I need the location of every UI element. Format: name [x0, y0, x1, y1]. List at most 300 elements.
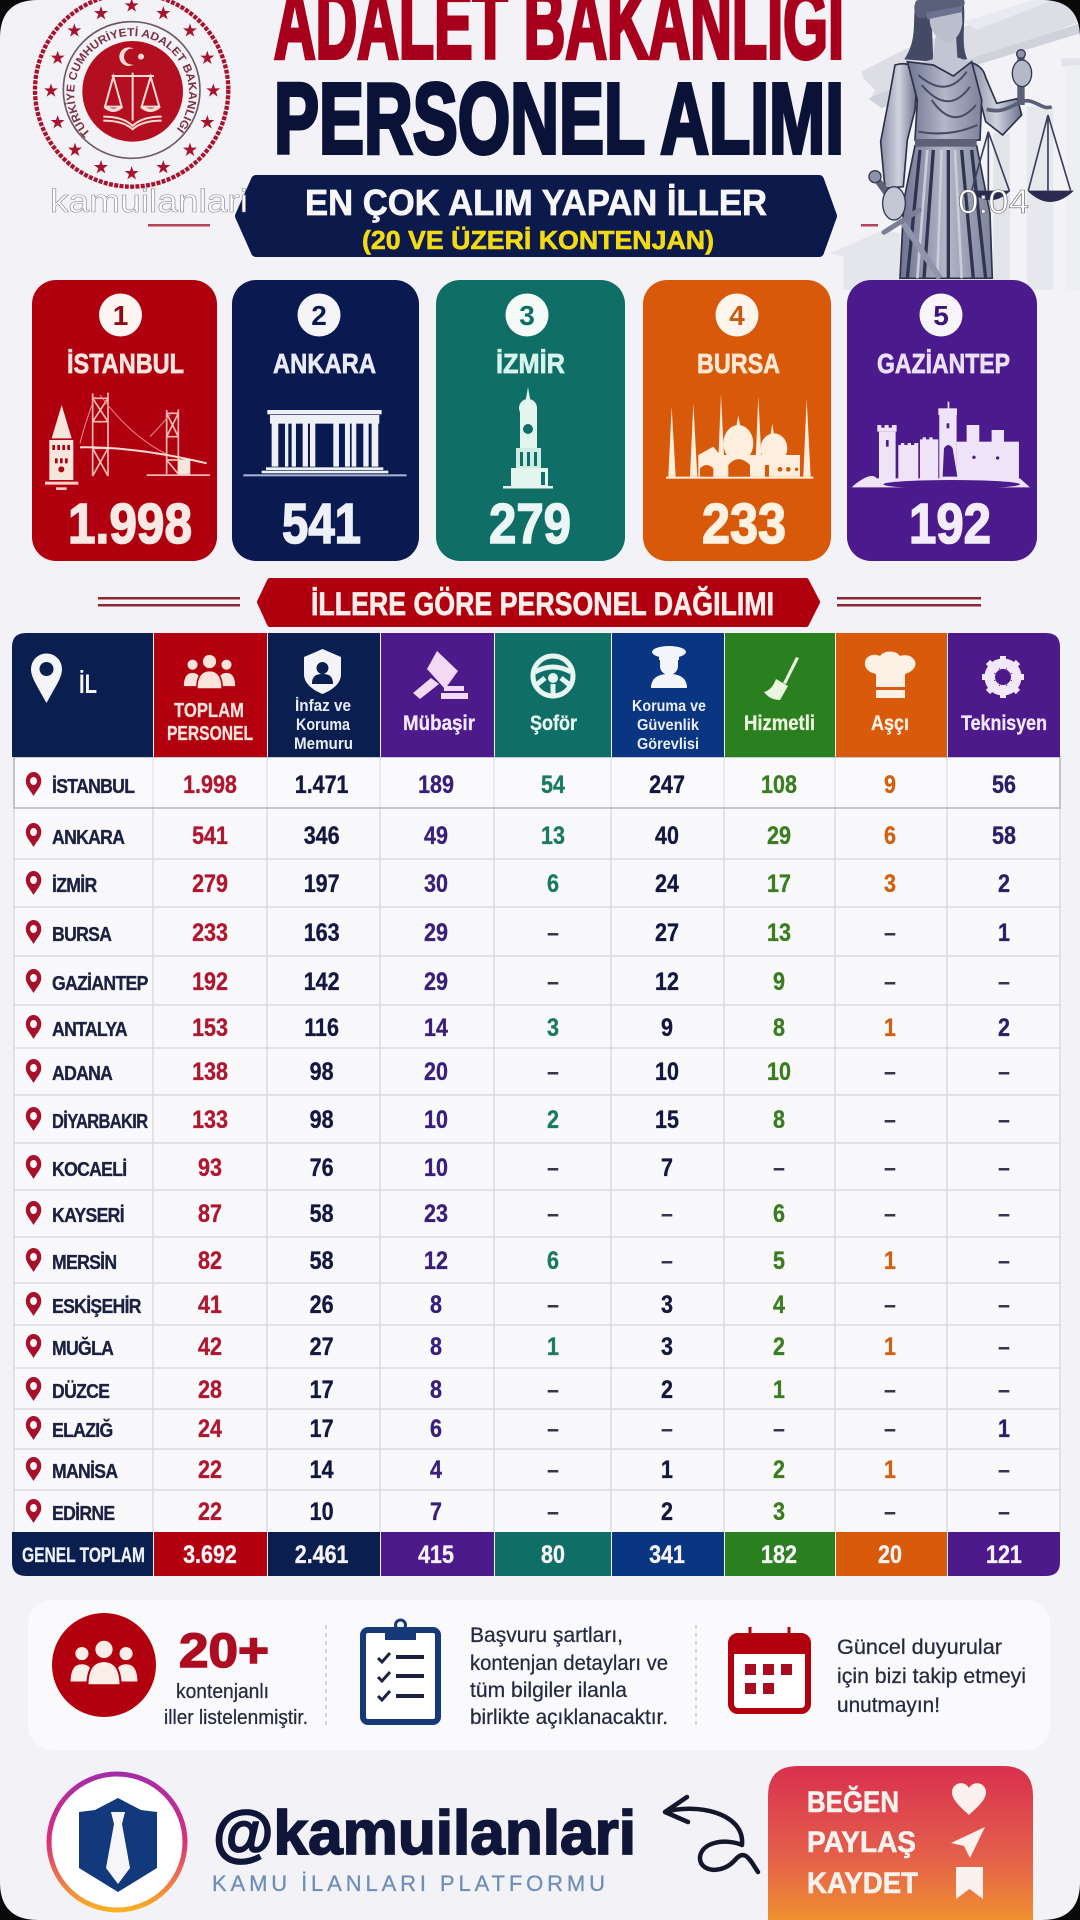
row: Diyarbakır — [26, 1105, 1010, 1133]
header cell: İnfaz ve Koruma Memuru — [268, 633, 380, 757]
gradient ring — [49, 1774, 185, 1910]
row: Düzce: – — [998, 1375, 1010, 1403]
row: Kocaeli: KOCAELİ — [52, 1159, 127, 1181]
row: İstanbul: 56 — [992, 770, 1016, 798]
table body background — [14, 757, 1060, 1532]
row: Antalya: 8 — [773, 1013, 785, 1041]
label: Aşçı — [871, 712, 909, 735]
row: Kayseri: – — [998, 1199, 1010, 1227]
row: İzmir: 279 — [192, 869, 228, 897]
row: Elazığ: 1 — [998, 1414, 1010, 1442]
row: Muğla: 8 — [430, 1332, 442, 1360]
label: İnfaz ve — [295, 696, 351, 715]
row: Eskişehir: 41 — [198, 1290, 222, 1318]
table grid — [14, 757, 1060, 1532]
row: Düzce: – — [547, 1375, 559, 1403]
row: Diyarbakır: 8 — [773, 1105, 785, 1133]
row: Ankara: 29 — [767, 821, 791, 849]
row: Mersin: MERSİN — [52, 1252, 116, 1274]
row: İstanbul: 9 — [884, 770, 896, 798]
row: Düzce: – — [884, 1375, 896, 1403]
row: Kayseri: – — [547, 1199, 559, 1227]
statue face — [928, 7, 962, 43]
row: Edirne: 2 — [661, 1497, 673, 1525]
row: İzmir: 3 — [884, 869, 896, 897]
video overlay: timer: 0:04 — [958, 183, 1029, 220]
decorative lines right — [837, 597, 981, 606]
row: Edirne: 10 — [310, 1497, 334, 1525]
row: Muğla: 42 — [198, 1332, 222, 1360]
row: Mersin: 58 — [310, 1246, 334, 1274]
row: Antalya: ANTALYA — [52, 1019, 128, 1041]
row: Elazığ: – — [661, 1414, 673, 1442]
value: 279 — [489, 492, 571, 556]
row: Edirne: – — [998, 1497, 1010, 1525]
row: Elazığ: – — [884, 1414, 896, 1442]
total values: 415 — [418, 1540, 454, 1568]
row: Kayseri: 6 — [773, 1199, 785, 1227]
row: Diyarbakır: 2 — [547, 1105, 559, 1133]
row: Eskişehir: ESKİŞEHİR — [52, 1296, 142, 1318]
row: Antalya: 3 — [547, 1013, 559, 1041]
row: Antalya: 9 — [661, 1013, 673, 1041]
background temple — [830, 0, 1080, 290]
row: Kocaeli: – — [773, 1153, 785, 1181]
like: BEĞEN — [807, 1785, 899, 1819]
row: Manisa — [26, 1455, 1010, 1483]
row: Ankara: 346 — [304, 821, 340, 849]
crescent and star — [119, 47, 138, 66]
row: Eskişehir: – — [998, 1290, 1010, 1318]
row: Kocaeli: 93 — [198, 1153, 222, 1181]
panel: İstanbul card — [32, 280, 217, 561]
icon: mosque — [666, 394, 813, 479]
row: İstanbul: 247 — [649, 770, 685, 798]
row: Diyarbakır: 98 — [310, 1105, 334, 1133]
row: Diyarbakır: – — [998, 1105, 1010, 1133]
rank badge: 5 — [933, 300, 949, 331]
row: Bursa: – — [547, 918, 559, 946]
header cell: Aşçı — [836, 633, 947, 757]
row: Bursa: 27 — [655, 918, 679, 946]
row: Muğla: 1 — [547, 1332, 559, 1360]
scales — [1017, 55, 1025, 105]
statue hair — [904, 2, 967, 62]
icon: shield — [79, 1798, 157, 1892]
text: 20+: kontenjanlı — [176, 1681, 269, 1703]
text: follow: unutmayın! — [837, 1694, 940, 1717]
rank badge: 2 — [311, 300, 327, 331]
row: Gaziantep — [26, 967, 1010, 995]
icon: people — [183, 654, 236, 689]
icon: gavel — [413, 651, 468, 699]
statue of Lady Justice — [869, 0, 1074, 278]
text: follow: için bizi takip etmeyi — [837, 1665, 1026, 1688]
row: Eskişehir: 8 — [430, 1290, 442, 1318]
panel: Bursa card — [643, 280, 831, 561]
row: Mersin: – — [998, 1246, 1010, 1274]
row: Adana: – — [547, 1057, 559, 1085]
row: İzmir: 6 — [547, 869, 559, 897]
row: İstanbul — [26, 770, 1016, 798]
row: Bursa — [26, 918, 1010, 946]
row: Düzce: 8 — [430, 1375, 442, 1403]
header cell: Koruma ve Güvenlik Görevlisi: Görevlisi — [637, 736, 699, 753]
ministry seal — [32, 0, 230, 189]
icon: clock tower — [503, 387, 553, 488]
icon: clipboard — [363, 1620, 438, 1722]
icon: chef hat — [865, 652, 915, 698]
statue crown and blindfold — [914, 0, 965, 18]
statue neck — [920, 35, 970, 76]
İstanbul row highlight — [14, 757, 1060, 808]
text: application details: Başvuru şartları, — [470, 1624, 623, 1647]
row: Antalya — [26, 1013, 1010, 1041]
row: Bursa: BURSA — [52, 924, 112, 946]
header cell: Şoför — [495, 633, 611, 757]
row: Muğla: MUĞLA — [52, 1337, 114, 1360]
row: Edirne: 22 — [198, 1497, 222, 1525]
panel: Ankara card — [232, 280, 419, 561]
row: Düzce: 2 — [661, 1375, 673, 1403]
text: application details: tüm bilgiler ilanla — [470, 1679, 627, 1702]
row: Elazığ — [26, 1414, 1010, 1442]
row: İstanbul: 1.471 — [295, 770, 349, 798]
section title: İLLERE GÖRE PERSONEL DAĞILIMI — [311, 586, 774, 622]
total values: 182 — [761, 1540, 797, 1568]
row: Antalya: 153 — [192, 1013, 228, 1041]
row: Manisa: 2 — [773, 1455, 785, 1483]
row: Elazığ: – — [773, 1414, 785, 1442]
city name: GAZİANTEP — [877, 348, 1010, 379]
row: Eskişehir: – — [884, 1290, 896, 1318]
text: 20+: iller listelenmiştir. — [164, 1707, 308, 1729]
text: 20+: 20+ — [179, 1625, 269, 1678]
row: İzmir: 30 — [424, 869, 448, 897]
row: Kocaeli: 10 — [424, 1153, 448, 1181]
row: Muğla: 3 — [661, 1332, 673, 1360]
total values: 341 — [649, 1540, 685, 1568]
row: Mersin: 6 — [547, 1246, 559, 1274]
row: Mersin: 5 — [773, 1246, 785, 1274]
row: Antalya: 14 — [424, 1013, 448, 1041]
label: Şoför — [530, 712, 577, 735]
row: Manisa: 1 — [661, 1455, 673, 1483]
footer logo — [49, 1774, 185, 1910]
icon: castle — [852, 402, 1030, 489]
small dashes beside banner — [148, 224, 878, 226]
row: Edirne: 3 — [773, 1497, 785, 1525]
total values: 80 — [541, 1540, 565, 1568]
row: Ankara: 6 — [884, 821, 896, 849]
row: Kocaeli: – — [547, 1153, 559, 1181]
statue torso — [907, 62, 982, 140]
row: Gaziantep: 192 — [192, 967, 228, 995]
row: Eskişehir: 26 — [310, 1290, 334, 1318]
banner: top cities — [240, 180, 832, 255]
icon: location pin — [31, 654, 62, 703]
value: 1.998 — [68, 492, 192, 556]
row: Ankara: 49 — [424, 821, 448, 849]
row: Adana: – — [998, 1057, 1010, 1085]
panel: İzmir card — [436, 280, 625, 561]
row: Gaziantep: 29 — [424, 967, 448, 995]
row: Mersin: – — [661, 1246, 673, 1274]
row: Edirne — [26, 1497, 1010, 1525]
row: Elazığ: – — [547, 1414, 559, 1442]
icon: gear — [982, 656, 1024, 698]
row: Elazığ: ELAZIĞ — [52, 1419, 113, 1442]
row: Eskişehir — [26, 1290, 1010, 1318]
label: Koruma ve — [632, 698, 706, 715]
city name: İZMİR — [496, 348, 565, 379]
icon: broom — [764, 657, 799, 700]
row: Adana: 10 — [767, 1057, 791, 1085]
row: Adana: ADANA — [52, 1063, 113, 1085]
panel: call to action — [768, 1766, 1033, 1920]
statue belt — [915, 139, 977, 146]
row: Manisa: 14 — [310, 1455, 334, 1483]
row: Adana: 20 — [424, 1057, 448, 1085]
value: 233 — [702, 492, 786, 556]
icon: tie — [106, 1812, 130, 1884]
rope ring — [35, 0, 228, 187]
row: Ankara — [26, 821, 1016, 849]
row: İzmir: İZMİR — [52, 875, 97, 897]
total values: 20 — [878, 1540, 902, 1568]
city name: BURSA — [697, 348, 780, 379]
row: Kayseri: – — [884, 1199, 896, 1227]
banner heading: EN ÇOK ALIM YAPAN İLLER — [305, 182, 767, 223]
row: Gaziantep: – — [998, 967, 1010, 995]
inner ring — [63, 22, 200, 158]
icon: people in red circle — [52, 1613, 156, 1717]
row: Manisa: 4 — [430, 1455, 442, 1483]
row: Düzce: DÜZCE — [52, 1381, 109, 1403]
row: grand total — [12, 1532, 1060, 1576]
row: Edirne: – — [884, 1497, 896, 1525]
row: Edirne: EDİRNE — [52, 1503, 114, 1525]
banner subheading: (20 VE ÜZERİ KONTENJAN) — [362, 225, 714, 255]
row: Mersin: 1 — [884, 1246, 896, 1274]
icon: heart — [952, 1783, 986, 1815]
statue right arm — [972, 63, 1022, 135]
row: Ankara: 13 — [541, 821, 565, 849]
text: application details — [470, 1624, 668, 1729]
table header row — [12, 633, 1060, 757]
rank badge: 4 — [729, 300, 745, 331]
row: Ankara: 58 — [992, 821, 1016, 849]
row: Ankara: 541 — [192, 821, 228, 849]
header cell: Hizmetli — [725, 633, 835, 757]
statue skirt — [900, 146, 992, 278]
row: Gaziantep: – — [547, 967, 559, 995]
row: Düzce: 1 — [773, 1375, 785, 1403]
row: Diyarbakır: 10 — [424, 1105, 448, 1133]
row: Gaziantep: 142 — [304, 967, 340, 995]
icon: bookmark — [956, 1867, 983, 1899]
row: Adana — [26, 1057, 1010, 1085]
row: Adana: – — [884, 1057, 896, 1085]
icon: steering wheel — [533, 656, 573, 696]
row: Bursa: 1 — [998, 918, 1010, 946]
value: 541 — [282, 492, 361, 556]
row: Mersin — [26, 1246, 1010, 1274]
header cell: Toplam Personel: PERSONEL — [167, 723, 253, 745]
row: Manisa: – — [547, 1455, 559, 1483]
row: Antalya: 2 — [998, 1013, 1010, 1041]
value: 192 — [909, 492, 991, 556]
panel: info strip — [28, 1600, 1050, 1750]
scale emblem — [103, 73, 162, 129]
header cell: Koruma ve Güvenlik Görevlisi — [612, 633, 724, 757]
row: Gaziantep: 9 — [773, 967, 785, 995]
row: Kayseri: – — [661, 1199, 673, 1227]
row: İzmir: 24 — [655, 869, 679, 897]
row: Ankara: ANKARA — [52, 827, 125, 849]
video overlay: username: kamuilanlari — [50, 183, 248, 219]
row: Antalya: 116 — [304, 1013, 339, 1041]
row: Kocaeli: – — [884, 1153, 896, 1181]
row: Kayseri: 58 — [310, 1199, 334, 1227]
row: Kocaeli: – — [998, 1153, 1010, 1181]
row: Bursa: 233 — [192, 918, 228, 946]
row: Mersin: 12 — [424, 1246, 448, 1274]
handle: @kamuilanlari — [213, 1799, 636, 1868]
header cell: Mübaşir — [381, 633, 494, 757]
icon: Anıtkabir — [243, 410, 407, 476]
total values: 2.461 — [295, 1540, 349, 1568]
rank badge: 1 — [113, 300, 128, 331]
sword — [875, 177, 892, 200]
save: KAYDET — [807, 1867, 918, 1900]
row: Muğla: 27 — [310, 1332, 334, 1360]
table — [12, 633, 1060, 1576]
row: Kayseri: KAYSERİ — [52, 1205, 124, 1227]
row: İstanbul: 1.998 — [183, 770, 237, 798]
red disc — [82, 41, 183, 142]
text: 20+ — [164, 1625, 308, 1729]
row: Elazığ: 24 — [198, 1414, 222, 1442]
row: Manisa: 1 — [884, 1455, 896, 1483]
row: Manisa: 22 — [198, 1455, 222, 1483]
label: TOPLAM — [174, 700, 244, 722]
row: Eskişehir: – — [547, 1290, 559, 1318]
row: İstanbul: 108 — [761, 770, 797, 798]
row: Kayseri: 23 — [424, 1199, 448, 1227]
row: İzmir: 17 — [767, 869, 791, 897]
row: Bursa: 13 — [767, 918, 791, 946]
row: Muğla: – — [998, 1332, 1010, 1360]
row: İstanbul: İSTANBUL — [52, 776, 135, 798]
label: Mübaşir — [403, 712, 475, 735]
icon: shield — [304, 649, 341, 694]
total values: 3.692 — [183, 1540, 237, 1568]
row: İstanbul: 54 — [541, 770, 565, 798]
total label: GENEL TOPLAM — [22, 1544, 145, 1567]
header cell: İnfaz ve Koruma Memuru: Memuru — [294, 734, 353, 753]
row: Düzce: 17 — [310, 1375, 334, 1403]
row: Eskişehir: 3 — [661, 1290, 673, 1318]
icon: Galata tower and bridge — [45, 393, 210, 490]
row: Kocaeli — [26, 1153, 1010, 1181]
row: Antalya: 1 — [884, 1013, 896, 1041]
row: Manisa: – — [998, 1455, 1010, 1483]
header cell: Teknisyen — [948, 633, 1060, 757]
total values — [183, 1540, 1022, 1568]
row: Ankara: 40 — [655, 821, 679, 849]
header cell: Koruma ve Güvenlik Görevlisi: Güvenlik — [637, 717, 699, 734]
row: Kayseri: 87 — [198, 1199, 222, 1227]
row: Edirne: – — [547, 1497, 559, 1525]
city name: İSTANBUL — [67, 348, 184, 379]
rank badge — [298, 294, 340, 336]
panel: Gaziantep card — [847, 280, 1037, 561]
label: Teknisyen — [961, 712, 1047, 735]
icon: paper plane — [951, 1827, 985, 1858]
text: application details: birlikte açıklanacaktır. — [470, 1706, 668, 1729]
section heading: distribution — [98, 581, 981, 624]
star ring — [44, 0, 220, 179]
row: Adana: 138 — [192, 1057, 228, 1085]
row: Muğla: 1 — [884, 1332, 896, 1360]
header cell: İnfaz ve Koruma Memuru: Koruma — [296, 715, 350, 734]
header cell: Toplam Personel — [154, 633, 267, 757]
row: Diyarbakır: DİYARBAKIR — [52, 1111, 148, 1133]
row: Bursa: – — [884, 918, 896, 946]
rank badge: 3 — [519, 300, 535, 331]
row: Diyarbakır: 133 — [192, 1105, 228, 1133]
row: Diyarbakır: 15 — [655, 1105, 679, 1133]
rank badge — [506, 294, 548, 336]
arrow — [665, 1797, 758, 1872]
row: Gaziantep: 12 — [655, 967, 679, 995]
text: application details: kontenjan detayları ve — [470, 1652, 668, 1675]
row: Düzce: 28 — [198, 1375, 222, 1403]
row: Diyarbakır: – — [884, 1105, 896, 1133]
icon: calendar — [731, 1627, 808, 1711]
city name: ANKARA — [273, 348, 376, 379]
row: Adana: 10 — [655, 1057, 679, 1085]
statue left arm — [881, 64, 917, 188]
text: follow — [837, 1636, 1026, 1717]
row: Elazığ: 6 — [430, 1414, 442, 1442]
total values: 121 — [986, 1540, 1022, 1568]
row: Kayseri — [26, 1199, 1010, 1227]
text: follow: Güncel duyurular — [837, 1636, 1002, 1659]
label: İL — [79, 669, 97, 699]
row: Bursa: 29 — [424, 918, 448, 946]
row: Gaziantep: – — [884, 967, 896, 995]
row: Elazığ: 17 — [310, 1414, 334, 1442]
row: Düzce — [26, 1375, 1010, 1403]
label: Hizmetli — [744, 712, 815, 735]
title — [274, 0, 844, 175]
row: İstanbul: 189 — [418, 770, 454, 798]
row: Bursa: 163 — [304, 918, 340, 946]
header cell: İl — [12, 633, 153, 757]
row: Gaziantep: GAZİANTEP — [52, 973, 149, 995]
rank badge — [716, 294, 758, 336]
row: Edirne: 7 — [430, 1497, 442, 1525]
row: İzmir — [26, 869, 1010, 897]
row: İzmir: 197 — [304, 869, 340, 897]
row: Manisa: MANİSA — [52, 1461, 118, 1483]
tagline: KAMU İLANLARI PLATFORMU — [212, 1871, 605, 1896]
row: Kocaeli: 76 — [310, 1153, 334, 1181]
icon: officer — [651, 646, 687, 688]
rank badge — [99, 294, 142, 336]
